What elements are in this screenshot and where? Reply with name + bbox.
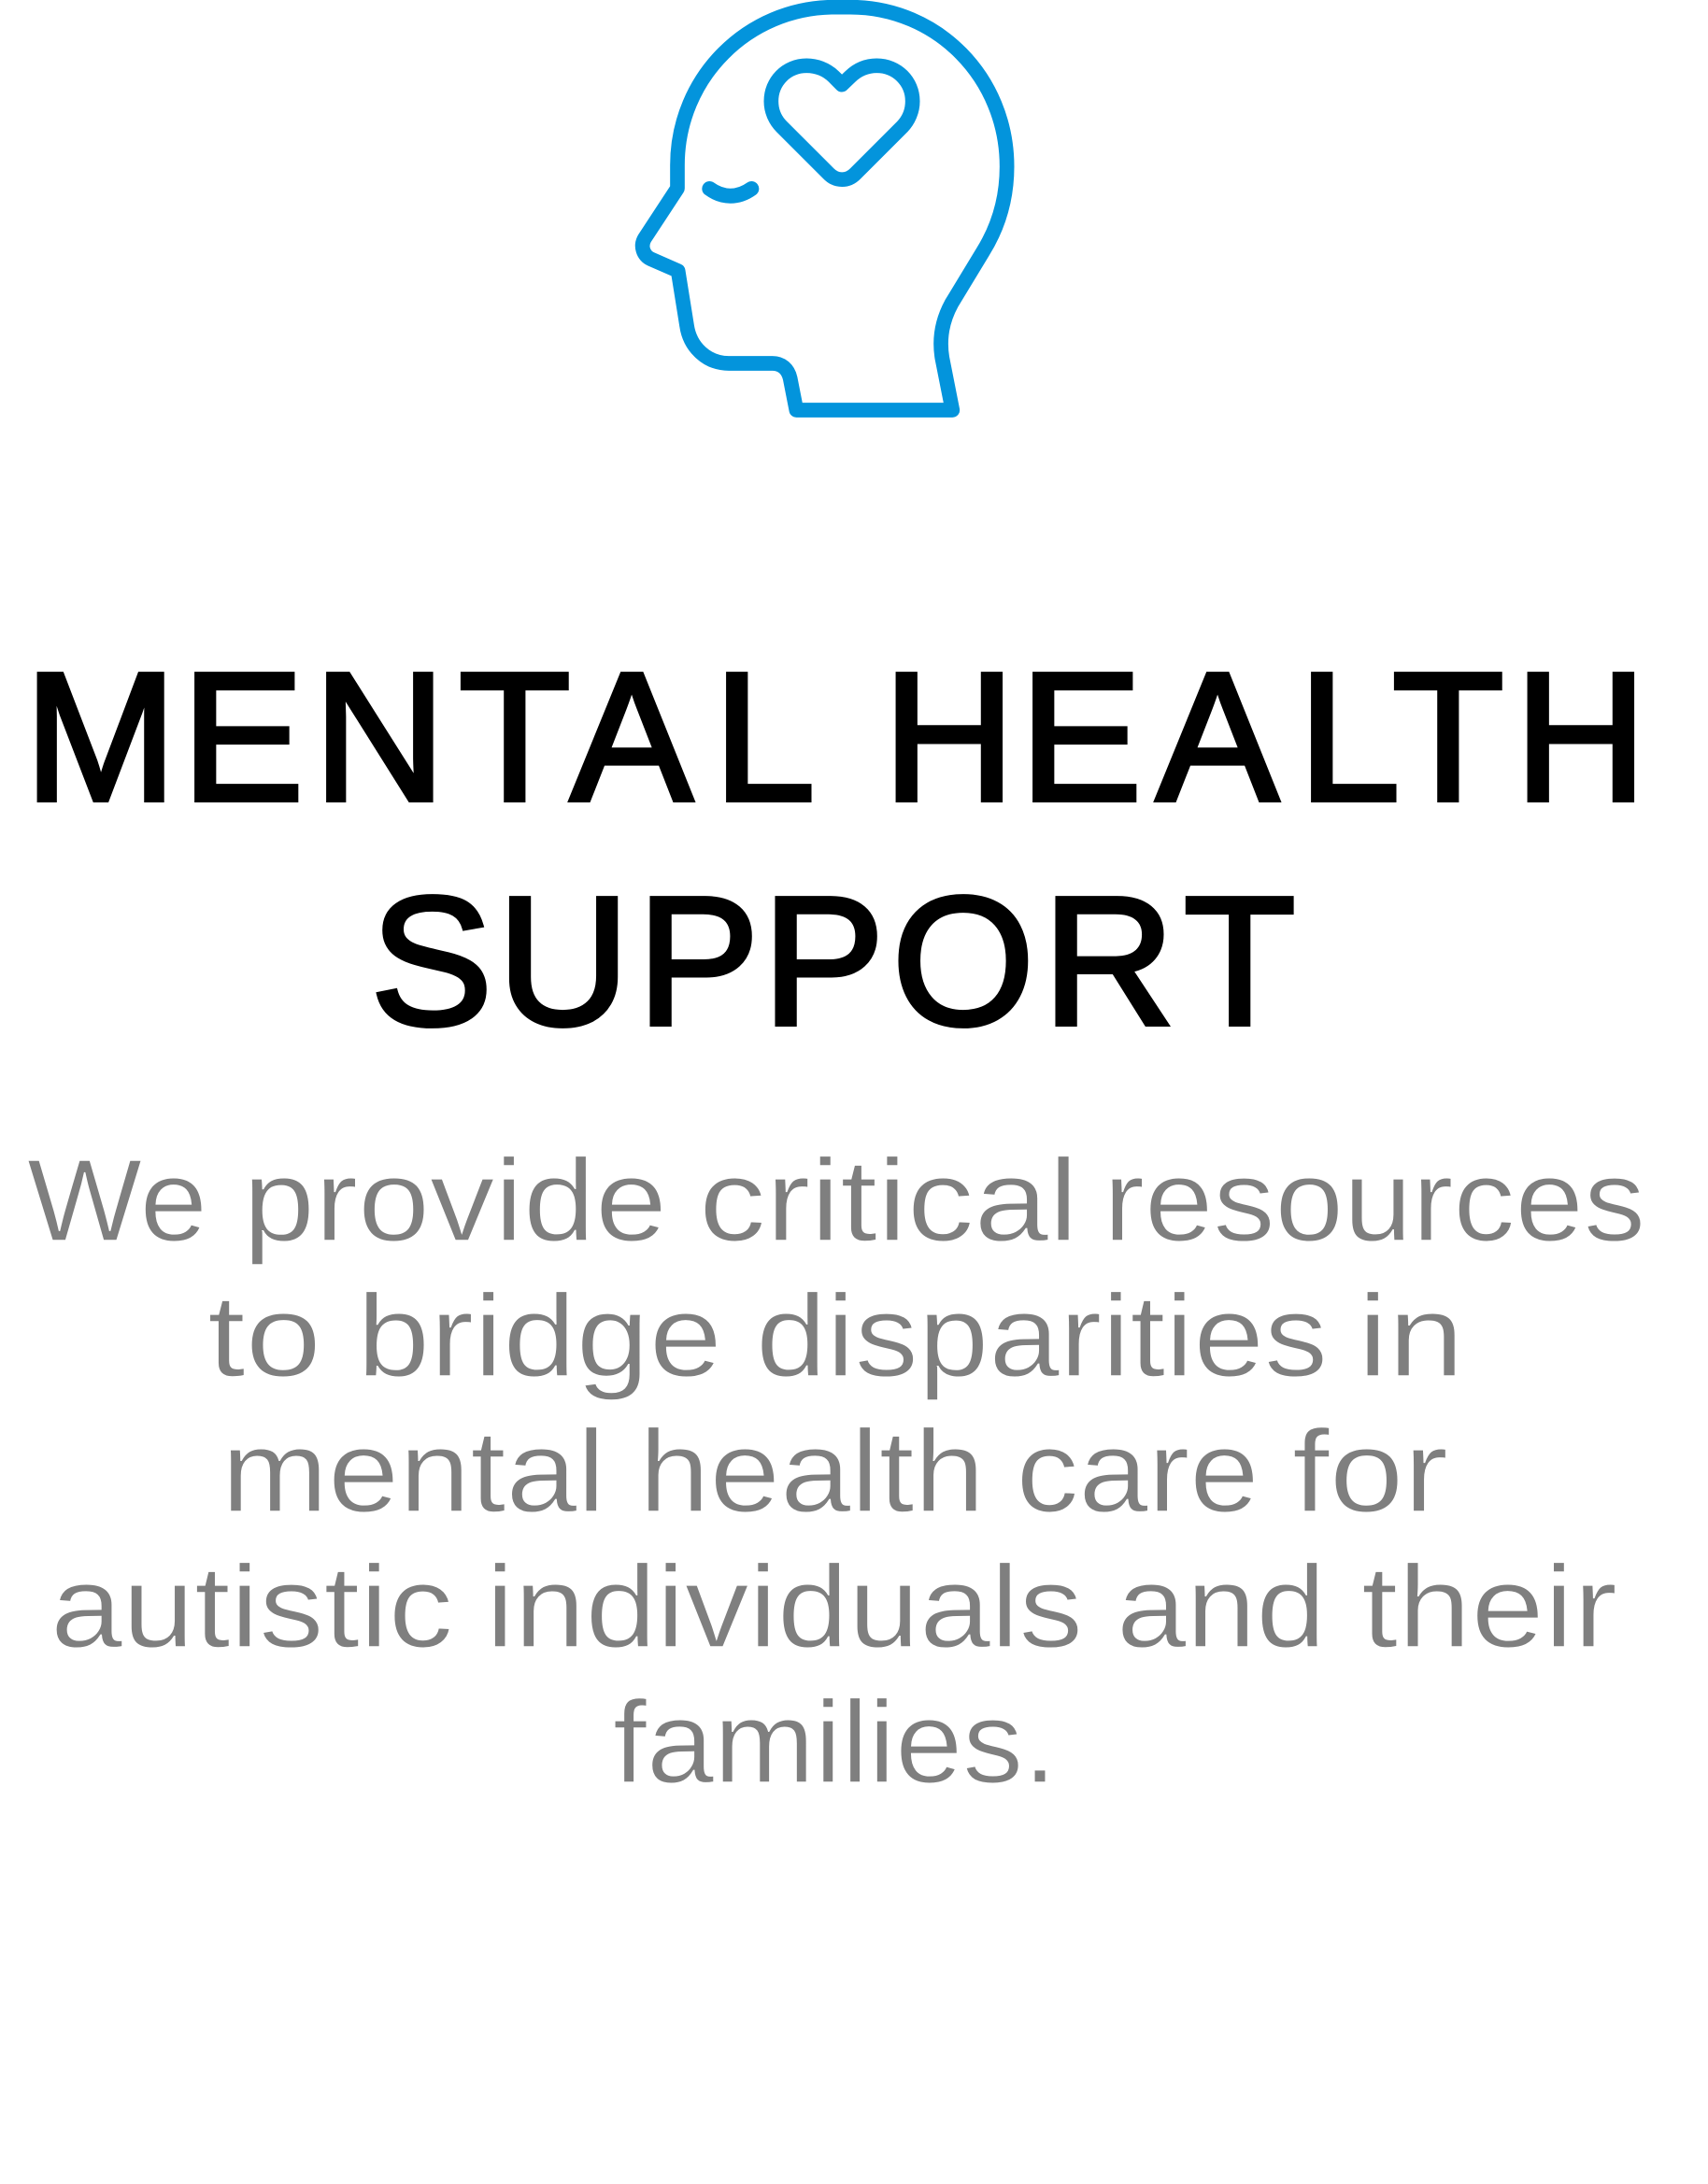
body line 5: families.	[613, 1678, 1057, 1808]
heading line 1: MENTAL HEALTH	[24, 635, 1647, 839]
heading	[24, 635, 1647, 1063]
body line 1	[27, 1136, 1645, 1266]
icon part: head outline	[643, 7, 1007, 410]
body line 3	[221, 1407, 1448, 1537]
body line 1: We	[27, 1136, 207, 1266]
body line 2: in	[1358, 1271, 1464, 1401]
body line 3: health	[639, 1407, 985, 1537]
icon: head profile with heart	[643, 7, 1007, 410]
body line 2: disparities	[756, 1271, 1328, 1401]
body line 1: resources	[1103, 1136, 1645, 1266]
body line 2: bridge	[357, 1271, 722, 1401]
icon part: closed eye	[709, 189, 751, 196]
body line 1: critical	[699, 1136, 1078, 1266]
body line 3: mental	[221, 1407, 605, 1537]
body line 4: autistic	[50, 1542, 453, 1672]
body text	[27, 1136, 1645, 1808]
body line 1: provide	[243, 1136, 667, 1266]
body line 3: care	[1017, 1407, 1260, 1537]
heading line 2: SUPPORT	[370, 859, 1296, 1063]
body line 2: to	[207, 1271, 321, 1401]
icon part: heart	[771, 65, 913, 179]
body line 4: their	[1361, 1542, 1617, 1672]
body line 2	[207, 1271, 1464, 1401]
body line 3: for	[1292, 1407, 1448, 1537]
body line 4: individuals	[486, 1542, 1083, 1672]
body line 4	[50, 1542, 1617, 1672]
body line 4: and	[1117, 1542, 1326, 1672]
